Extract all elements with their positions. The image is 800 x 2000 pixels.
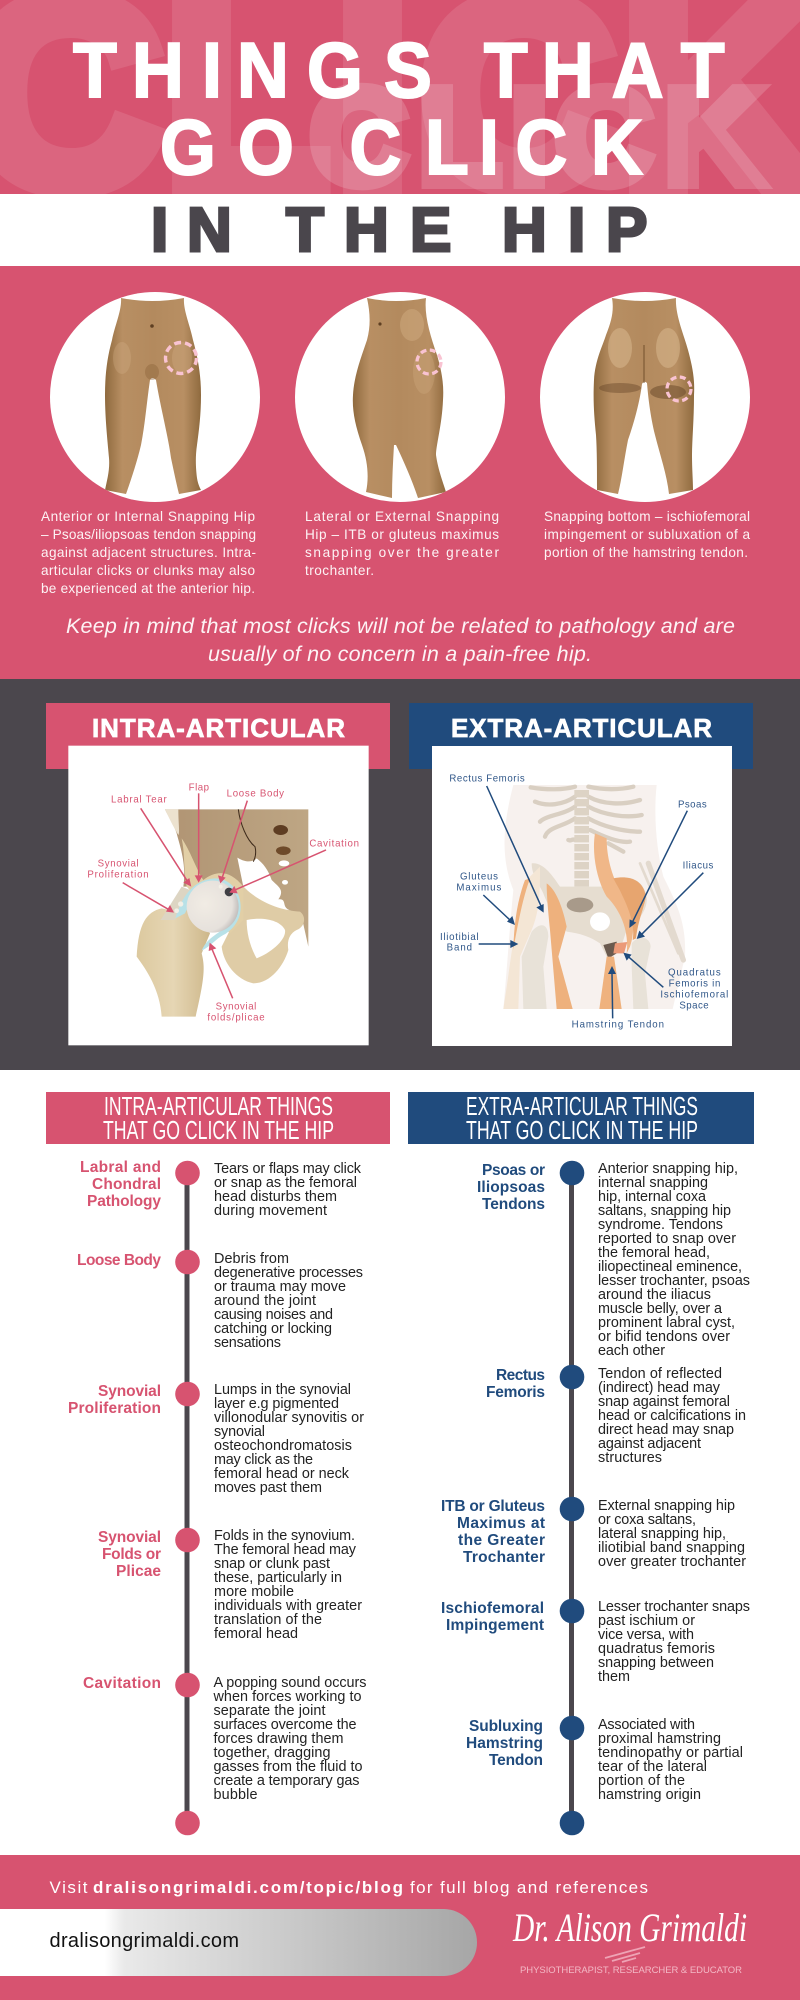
blog link text: for full blog and references [410, 1878, 648, 1897]
diagram: intra-articular hip joint: Labral Tear [111, 795, 167, 806]
item: psoas or iliopsoas tendons: iliopectineal eminence, [598, 1259, 742, 1275]
item: cavitation: separate the joint [214, 1703, 326, 1719]
signature logo: PHYSIOTHERAPIST, RESEARCHER & EDUCATOR [520, 1965, 742, 1976]
diagram: extra-articular muscles: Ischiofemoral [660, 990, 728, 1001]
item: cavitation: when forces working to [212, 1689, 362, 1705]
skeleton [522, 787, 683, 1009]
item: synovial folds or plicae: Folds in the synovium. [214, 1528, 355, 1544]
item: subluxing hamstring tendon: Hamstring [466, 1735, 543, 1752]
item: synovial proliferation: osteochondromatosis [214, 1438, 352, 1454]
item: ischiofemoral impingement [441, 1599, 750, 1685]
item: synovial folds or plicae: Synovial [98, 1529, 161, 1546]
item: subluxing hamstring tendon: hamstring origin [598, 1787, 701, 1803]
caption: anterior [41, 509, 256, 596]
item: cavitation: A popping sound occurs [214, 1675, 366, 1691]
item: synovial folds or plicae: Folds or [102, 1546, 161, 1563]
item: psoas or iliopsoas tendons: the femoral head, [598, 1245, 710, 1261]
item: psoas or iliopsoas tendons: Psoas or [482, 1162, 545, 1179]
item: ITB or gluteus maximus: over greater trochanter [598, 1554, 746, 1570]
item: ITB or gluteus maximus: lateral snapping hip, [598, 1526, 726, 1542]
item: loose body [77, 1251, 363, 1351]
figure: anterior snapping hip [50, 292, 260, 502]
item: psoas or iliopsoas tendons: internal snapping [598, 1175, 708, 1191]
femur [137, 908, 210, 1017]
heading: extra-articular list: THAT GO CLICK IN THE HIP [466, 1115, 698, 1145]
caption: anterior: Anterior or Internal Snapping Hip [41, 509, 255, 524]
item: subluxing hamstring tendon: portion of the [598, 1773, 685, 1789]
diagram: extra-articular muscles [432, 746, 732, 1046]
item: synovial proliferation: villonodular synovitis or [214, 1410, 364, 1426]
item: synovial folds or plicae: snap or clunk past [214, 1556, 330, 1572]
caption: lateral: Hip – ITB or gluteus maximus [305, 527, 499, 542]
item: psoas or iliopsoas tendons: prominent labral cyst, [598, 1315, 735, 1331]
item: synovial proliferation: moves past them [214, 1480, 322, 1496]
item: psoas or iliopsoas tendons: lesser trochanter, psoas [598, 1273, 750, 1289]
item: psoas or iliopsoas tendons: Anterior snapping hip, [598, 1161, 738, 1177]
item: ischiofemoral impingement: Impingement [446, 1617, 544, 1634]
heading: extra-articular list [408, 1091, 754, 1145]
diagram: extra-articular muscles: Iliotibial [440, 932, 479, 943]
item: psoas or iliopsoas tendons: or bifid tendons over [598, 1329, 730, 1345]
item: rectus femoris [486, 1366, 746, 1466]
website pill: dralisongrimaldi.com [50, 1930, 239, 1952]
item: loose body: Loose Body [77, 1252, 161, 1269]
item: subluxing hamstring tendon: proximal hamstring [598, 1731, 721, 1747]
caption: lateral [305, 509, 499, 578]
signature logo [512, 1905, 747, 1976]
item: rectus femoris: Rectus [496, 1367, 545, 1384]
timeline: extra-articular [441, 1161, 750, 1835]
diagram: extra-articular muscles: Femoris in [669, 979, 720, 990]
heading: intra-articular list: INTRA-ARTICULAR THINGS [104, 1091, 333, 1121]
item: ischiofemoral impingement: past ischium or [598, 1613, 695, 1629]
item: labral and chondral pathology: Pathology [87, 1193, 161, 1210]
item: synovial folds or plicae: individuals with greater [214, 1598, 362, 1614]
subtitle band [0, 194, 800, 265]
item: psoas or iliopsoas tendons [477, 1161, 750, 1359]
item: cavitation: gasses from the fluid to [214, 1759, 362, 1775]
item: rectus femoris: Femoris [486, 1384, 545, 1401]
item: loose body: degenerative processes [214, 1265, 363, 1281]
item: ITB or gluteus maximus: or coxa saltans, [598, 1512, 696, 1528]
item: psoas or iliopsoas tendons: Iliopsoas [477, 1179, 545, 1196]
diagram: extra-articular muscles: Rectus Femoris [449, 774, 525, 785]
item: labral and chondral pathology: Tears or flaps may click [214, 1161, 362, 1177]
item: cavitation: surfaces overcome the [214, 1717, 356, 1733]
item: ischiofemoral impingement: Ischiofemoral [441, 1600, 544, 1617]
item: subluxing hamstring tendon: Subluxing [469, 1718, 543, 1735]
subtitle band: IN THE HIP [151, 196, 647, 265]
joint capsule and femoral head [161, 878, 241, 951]
item: synovial proliferation: may click as the [214, 1452, 313, 1468]
timeline: intra-articular [68, 1159, 366, 1835]
item: rectus femoris: (indirect) head may [598, 1380, 721, 1396]
diagram: extra-articular muscles: Gluteus [460, 872, 498, 883]
item: synovial proliferation: Synovial [98, 1383, 161, 1400]
header banner: CLICK [310, 61, 762, 212]
item: loose body: around the joint [214, 1293, 316, 1309]
diagram: extra-articular muscles: Iliacus [683, 861, 714, 872]
item: subluxing hamstring tendon: tendinopathy or partial [598, 1745, 743, 1761]
item: synovial folds or plicae: Plicae [116, 1563, 161, 1580]
item: psoas or iliopsoas tendons: saltans, snapping hip [598, 1203, 731, 1219]
item: synovial proliferation: Lumps in the synovial [214, 1382, 351, 1398]
blog link text [50, 1878, 648, 1897]
diagram: intra-articular hip joint [68, 746, 369, 1045]
item: labral and chondral pathology: Labral and [80, 1159, 161, 1176]
item: rectus femoris: against adjacent [598, 1436, 701, 1452]
item: psoas or iliopsoas tendons: reported to snap over [598, 1231, 736, 1247]
item: labral and chondral pathology: during movement [214, 1203, 327, 1219]
item: ITB or gluteus maximus: External snapping hip [598, 1498, 735, 1514]
diagram: extra-articular muscles: Quadratus [668, 968, 721, 979]
item: labral and chondral pathology: Chondral [92, 1176, 161, 1193]
figure: lateral snapping hip [295, 292, 505, 502]
item: ITB or gluteus maximus: Trochanter [463, 1549, 545, 1566]
item: synovial proliferation: Proliferation [68, 1400, 161, 1417]
callout: reassurance note [66, 614, 735, 666]
item: rectus femoris: Tendon of reflected [598, 1366, 722, 1382]
diagram: extra-articular muscles: Band [447, 943, 472, 954]
heading: extra-articular: EXTRA-ARTICULAR [451, 713, 712, 743]
diagram: intra-articular hip joint: Proliferation [87, 869, 149, 880]
item: psoas or iliopsoas tendons: each other [598, 1343, 665, 1359]
item: ITB or gluteus maximus: ITB or Gluteus [441, 1498, 545, 1515]
item: ITB or gluteus maximus: Maximus at [457, 1515, 545, 1532]
item: loose body: Debris from [214, 1251, 289, 1267]
caption: anterior: be experienced at the anterior hip. [41, 581, 255, 596]
item: loose body: causing noises and [214, 1307, 333, 1323]
item: loose body: sensations [214, 1335, 281, 1351]
item: ITB or gluteus maximus: iliotibial band snapping [598, 1540, 745, 1556]
diagram: intra-articular hip joint: Cavitation [309, 839, 359, 850]
caption: snapping bottom: Snapping bottom – ischiofemoral [544, 509, 750, 524]
title: GO CLICK [160, 103, 643, 191]
blog link text: Visit [50, 1878, 88, 1897]
item: synovial folds or plicae: The femoral head may [214, 1542, 357, 1558]
callout: reassurance note: usually of no concern in a pain-free hip. [208, 642, 592, 666]
diagram: intra-articular hip joint: Synovial [216, 1002, 256, 1013]
item: cavitation: bubble [214, 1787, 258, 1803]
item: psoas or iliopsoas tendons: syndrome. Tendons [598, 1217, 723, 1233]
arrow labels [123, 793, 326, 998]
item: loose body: catching or locking [214, 1321, 332, 1337]
website pill [0, 1909, 477, 1976]
item: cavitation: together, dragging [214, 1745, 330, 1761]
item: synovial folds or plicae: these, particularly in [214, 1570, 342, 1586]
item: rectus femoris: direct head may snap [598, 1422, 734, 1438]
arrow labels [479, 786, 703, 1018]
item: ITB or gluteus maximus: the Greater [458, 1532, 545, 1549]
item: ischiofemoral impingement: snapping between [598, 1655, 714, 1671]
item: cavitation: create a temporary gas [214, 1773, 360, 1789]
caption: snapping bottom [544, 509, 750, 560]
item: subluxing hamstring tendon: tear of the lateral [598, 1759, 707, 1775]
pelvis bones [165, 809, 308, 983]
item: rectus femoris: snap against femoral [598, 1394, 730, 1410]
item: ischiofemoral impingement: vice versa, with [598, 1627, 694, 1643]
item: synovial folds or plicae [98, 1528, 362, 1642]
item: subluxing hamstring tendon: Tendon [489, 1752, 543, 1769]
caption: lateral: trochanter. [305, 563, 374, 578]
caption: lateral: Lateral or External Snapping [305, 509, 499, 524]
item: synovial proliferation: layer e.g pigmented [214, 1396, 339, 1412]
item: synovial folds or plicae: more mobile [214, 1584, 294, 1600]
diagram: extra-articular muscles: Space [679, 1001, 709, 1012]
item: synovial proliferation: femoral head or neck [214, 1466, 350, 1482]
panel: lists background [0, 1070, 800, 1855]
blog link text: dralisongrimaldi.com/topic/blog [93, 1878, 403, 1897]
item: subluxing hamstring tendon [466, 1717, 743, 1803]
heading: intra-articular: INTRA-ARTICULAR [92, 713, 345, 743]
diagram: intra-articular hip joint: Flap [189, 783, 209, 794]
item: ischiofemoral impingement: Lesser trochanter snaps [598, 1599, 750, 1615]
diagram: extra-articular muscles: Maximus [456, 882, 502, 893]
figure: snapping bottom [540, 292, 750, 502]
item: synovial proliferation: synovial [214, 1424, 265, 1440]
item: ITB or gluteus maximus [441, 1498, 746, 1570]
item: loose body: or trauma may move [214, 1279, 346, 1295]
body silhouette [503, 785, 685, 1009]
item: psoas or iliopsoas tendons: muscle belly, over a [598, 1301, 722, 1317]
footer [0, 1855, 800, 2000]
item: subluxing hamstring tendon: Associated with [598, 1717, 695, 1733]
diagram: intra-articular hip joint: folds/plicae [207, 1012, 265, 1023]
muscles [503, 833, 646, 1009]
item: ischiofemoral impingement: them [598, 1669, 630, 1685]
heading: intra-articular list [46, 1091, 390, 1145]
diagram: intra-articular hip joint: Loose Body [227, 789, 284, 800]
item: psoas or iliopsoas tendons: around the iliacus [598, 1287, 711, 1303]
item: labral and chondral pathology: head disturbs them [214, 1189, 337, 1205]
title: THINGS THAT [73, 26, 725, 114]
panel: snapping hip types [0, 266, 800, 679]
item: rectus femoris: head or calcifications in [598, 1408, 746, 1424]
heading: extra-articular [409, 703, 753, 769]
panel: joint diagrams [0, 679, 800, 1070]
callout: reassurance note: Keep in mind that most clicks will not be related to pathology and are [66, 614, 735, 638]
item: cavitation [83, 1675, 366, 1803]
heading: intra-articular list: THAT GO CLICK IN THE HIP [103, 1115, 334, 1145]
item: cavitation: forces drawing them [214, 1731, 344, 1747]
caption: anterior: articular clicks or clunks may also [41, 563, 255, 578]
item: ischiofemoral impingement: quadratus femoris [598, 1641, 715, 1657]
diagram: extra-articular muscles: Hamstring Tendon [572, 1020, 664, 1031]
caption: snapping bottom: impingement or subluxation of a [544, 527, 750, 542]
item: synovial folds or plicae: femoral head [214, 1626, 298, 1642]
item: labral and chondral pathology: or snap as the femoral [214, 1175, 357, 1191]
item: labral and chondral pathology [80, 1159, 362, 1219]
caption: anterior: against adjacent structures. Intra- [41, 545, 256, 560]
title [73, 26, 725, 191]
item: synovial folds or plicae: translation of the [214, 1612, 322, 1628]
heading: intra-articular [46, 703, 390, 769]
caption: snapping bottom: portion of the hamstring tendon. [544, 545, 748, 560]
diagram: intra-articular hip joint: Synovial [98, 859, 139, 870]
caption: lateral: snapping over the greater [305, 545, 499, 560]
item: psoas or iliopsoas tendons: hip, internal coxa [598, 1189, 706, 1205]
item: rectus femoris: structures [598, 1450, 662, 1466]
item: cavitation: Cavitation [83, 1675, 161, 1692]
caption: anterior: – Psoas/iliopsoas tendon snapping [41, 527, 256, 542]
diagram: extra-articular muscles: Psoas [678, 800, 707, 811]
item: psoas or iliopsoas tendons: Tendons [482, 1196, 545, 1213]
item: synovial proliferation [68, 1382, 364, 1496]
